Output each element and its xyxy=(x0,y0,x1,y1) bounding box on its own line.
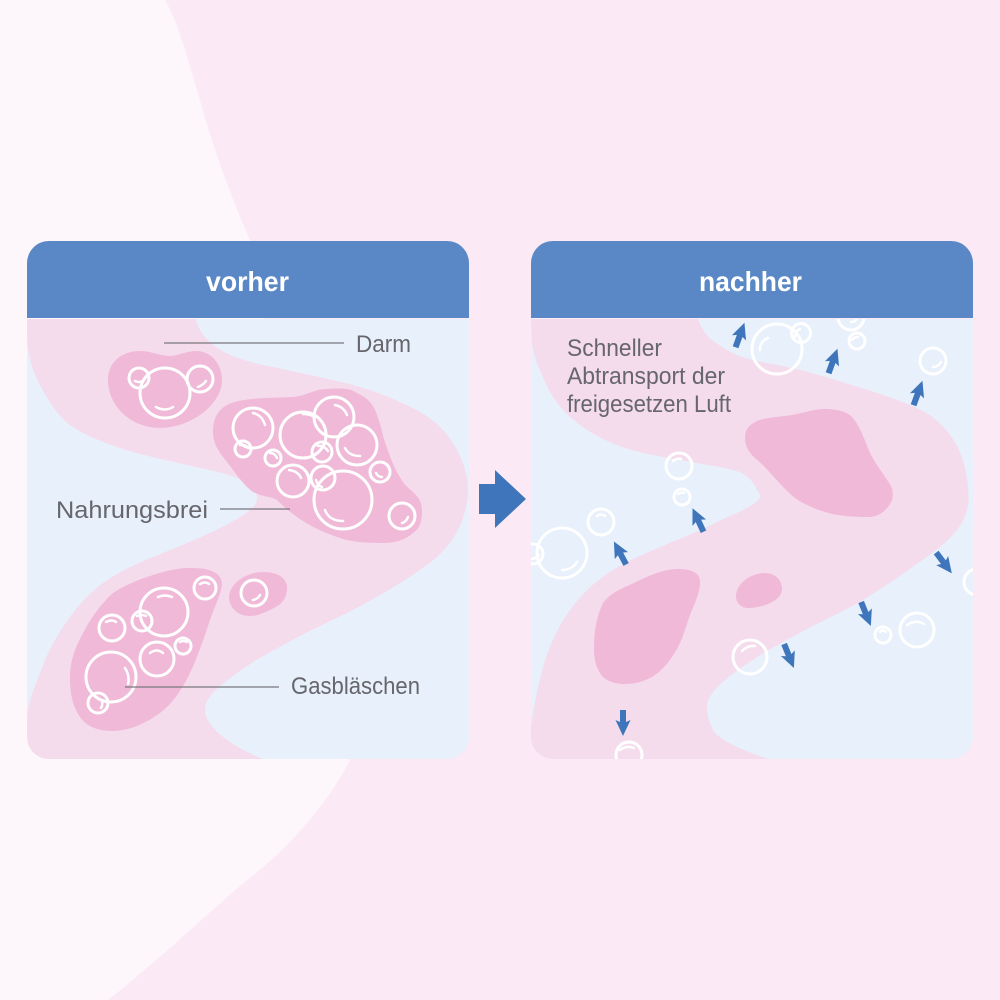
label: Nahrungsbrei: Nahrungsbrei xyxy=(56,497,208,524)
text: Schneller Abtransport der freigesetzen Luft xyxy=(567,335,731,418)
panel header: vorher xyxy=(27,241,469,318)
panel: vorher xyxy=(20,241,469,770)
panel header: nachher xyxy=(531,241,973,318)
food mass blobs xyxy=(594,409,893,684)
text: Schneller Abtransport der freigesetzen Luft: Schneller xyxy=(567,335,662,362)
arrow: vorher to nachher xyxy=(479,470,526,528)
background light shape xyxy=(0,0,350,1000)
food mass blobs xyxy=(70,351,422,731)
gas bubbles xyxy=(86,366,415,713)
intestine shape xyxy=(20,319,468,770)
label: Gasbläschen: Gasbläschen xyxy=(291,673,420,700)
small outward arrows xyxy=(607,320,958,736)
panel body with intestine: nachher xyxy=(531,319,973,759)
panel header: vorher: vorher xyxy=(206,266,289,297)
panel header: nachher: nachher xyxy=(699,266,802,297)
panel body with intestine: vorher xyxy=(20,319,469,770)
text: Schneller Abtransport der freigesetzen Luft: Abtransport der xyxy=(567,363,725,390)
intestine shape xyxy=(525,319,969,770)
released bubbles xyxy=(531,319,973,759)
label: Darm: Darm xyxy=(356,331,411,358)
text: Schneller Abtransport der freigesetzen Luft: freigesetzen Luft xyxy=(567,391,731,418)
panel: nachher xyxy=(523,241,990,770)
